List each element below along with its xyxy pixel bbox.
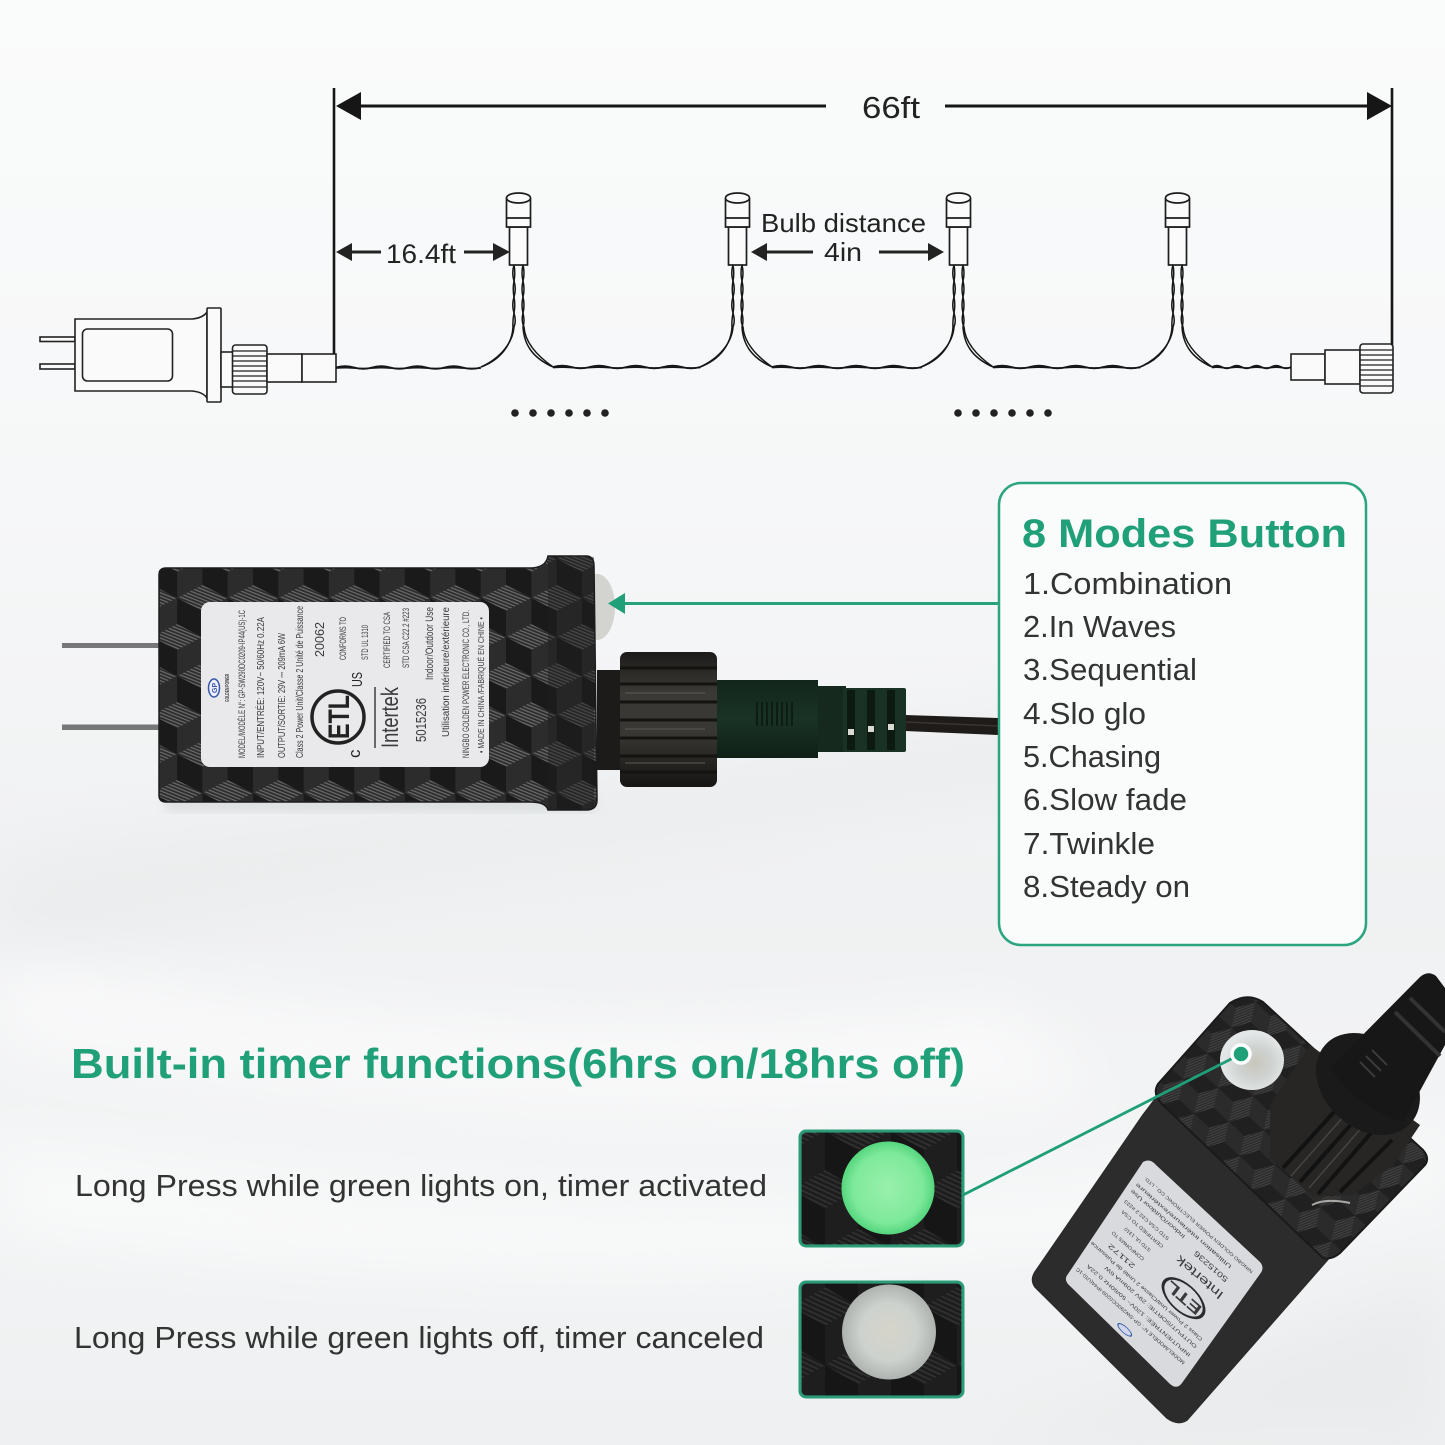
rating label text: INPUT/ENTRÉE: 120V~ 50/60Hz 0.22A <box>1085 1263 1192 1358</box>
mode list: 6.Slow fade <box>1023 782 1187 817</box>
continuation dots <box>511 409 1052 417</box>
dimension diagram <box>40 88 1393 417</box>
mode list: 2.In Waves <box>1023 609 1176 644</box>
rating label text: CERTIFIED TO CSA <box>1120 1209 1164 1249</box>
green cable plug <box>717 680 906 758</box>
rating label text: Intertek <box>1173 1252 1226 1303</box>
adapter shadow <box>165 792 595 812</box>
rating label text: 20062 <box>312 622 327 657</box>
rating label text: Class 2 Power Unit/Classe 2 Unité de Puissance <box>1089 1240 1203 1342</box>
unlit indicator <box>842 1284 936 1380</box>
mode list: 8.Steady on <box>1023 869 1190 904</box>
mode list: 3.Sequential <box>1023 652 1197 687</box>
white mode button <box>579 574 615 640</box>
adapter head shading <box>548 557 594 809</box>
dimension guide lines <box>334 88 1392 392</box>
button <box>1220 1030 1284 1090</box>
panel: green light lit <box>800 1131 963 1246</box>
rating label text: OUTPUT/SORTIE: 29V 209mA 6W <box>1103 1264 1198 1350</box>
arrow and label: 16.4ft: 16.4ft <box>386 239 457 269</box>
rating label text: CERTIFIED TO CSA <box>382 612 393 668</box>
rating label text: Utilisation intérieure/extérieure <box>440 607 452 737</box>
rating label text: STD UL 1310 <box>360 625 371 660</box>
rating label text: 5015236 <box>413 698 430 742</box>
arrow and label: bulb distance 4in: 4in <box>824 237 862 267</box>
text: timer canceled instruction: Long Press while green lights off, timer canceled <box>74 1320 764 1355</box>
rating label text <box>1063 1173 1254 1377</box>
green indicator <box>842 1142 934 1234</box>
adapter body <box>1032 1040 1345 1423</box>
arrow and label: bulb distance 4in <box>751 208 944 267</box>
end connector line drawing <box>1291 344 1393 393</box>
panel: 8 modes button <box>999 483 1366 945</box>
mode list: 1.Combination <box>1023 566 1232 601</box>
rating label text: • MADE IN CHINA /FABRIQUÉ EN CHINE • <box>477 617 486 753</box>
rating label text: OUTPUT/SORTIE: 29V ⎓ 209mA 6W <box>277 633 288 758</box>
rating label text: NINGBO GOLDEN POWER ELECTRONIC CO., LTD. <box>1143 1175 1254 1274</box>
rating label text: STD CSA C22.2 #223 <box>1123 1199 1170 1242</box>
rating label text: CONFORMS TO <box>1110 1230 1145 1262</box>
rating label text: 5015236 <box>1193 1249 1230 1283</box>
panel: green light off <box>800 1282 963 1397</box>
text: timer activated instruction: Long Press while green lights on, timer activated <box>75 1168 767 1203</box>
power plug line drawing <box>40 308 336 402</box>
callout line: button detail <box>963 1045 1250 1195</box>
adapter head <box>1156 997 1427 1258</box>
rating label <box>201 602 489 767</box>
icon: GP logo <box>208 679 220 697</box>
adapter body <box>159 556 597 810</box>
rating label <box>1063 1161 1262 1387</box>
arrow: points to mode button <box>608 593 999 614</box>
mode list: 4.Slo glo <box>1023 696 1146 731</box>
icon: ETL listed mark: ETL <box>323 695 356 739</box>
heading: built-in timer functions: Built-in timer functions(6hrs on/18hrs off) <box>71 1040 965 1087</box>
rating label text: Intertek <box>377 686 404 748</box>
label: 66ft: 66ft <box>862 90 920 125</box>
cable boot <box>1330 973 1445 1122</box>
power adapter photo <box>62 556 998 812</box>
rating label text: Class 2 Power Unit/Classe 2 Unité de Puissance <box>295 606 306 758</box>
mode list: 7.Twinkle <box>1023 826 1155 861</box>
rating label text: INPUT/ENTRÉE: 120V~ 50/60Hz 0.22A <box>254 617 267 758</box>
twisted wires <box>336 265 1291 369</box>
rating label text: STD CSA C22.2 #223 <box>401 608 412 668</box>
arrow and label: 16.4ft <box>336 239 510 269</box>
icon: GP logo: GP <box>212 683 219 693</box>
icon: ETL listed mark <box>312 672 375 758</box>
rating label text: 21172 <box>1107 1241 1137 1270</box>
rating label text: Indoor/Outdoor Use <box>1129 1188 1186 1240</box>
heading: 8 Modes Button: 8 Modes Button <box>1022 512 1347 556</box>
rating label text: GOLDEN POWER <box>225 674 231 702</box>
rating label text <box>225 606 486 758</box>
rating label text: ETL <box>1163 1277 1205 1319</box>
output cable <box>905 715 998 735</box>
icon: ETL listed mark: c <box>345 749 364 758</box>
rating label text: NINGBO GOLDEN POWER ELECTRONIC CO., LTD. <box>461 610 471 758</box>
mode list <box>1023 566 1232 904</box>
rating label text: CONFORMS TO <box>338 617 349 660</box>
rating label text: Utilisation intérieure/extérieure <box>1134 1181 1233 1270</box>
arrow: 66ft span <box>336 92 1392 120</box>
icon: ETL listed mark: US <box>349 672 366 687</box>
rating label text: Indoor/Outdoor Use <box>424 607 436 680</box>
angled adapter photo <box>1032 973 1445 1423</box>
rating label text: MODEL/MODÈLE N°: GP-SW290DC0209-IP44(US)-1C <box>237 610 248 758</box>
threaded nut <box>1270 1045 1420 1205</box>
nut collar <box>1296 1012 1440 1156</box>
bulbs <box>506 193 1190 265</box>
arrow and label: bulb distance 4in: Bulb distance <box>761 208 926 238</box>
rating label text: STD UL 1310 <box>1123 1226 1152 1253</box>
mode list: 5.Chasing <box>1023 739 1161 774</box>
rating label text: MODEL/MODÈLE N°: GP-SW290DC0209-IP44(US)-1C <box>1074 1266 1186 1366</box>
plug prongs <box>62 643 159 730</box>
threaded nut <box>597 652 717 787</box>
